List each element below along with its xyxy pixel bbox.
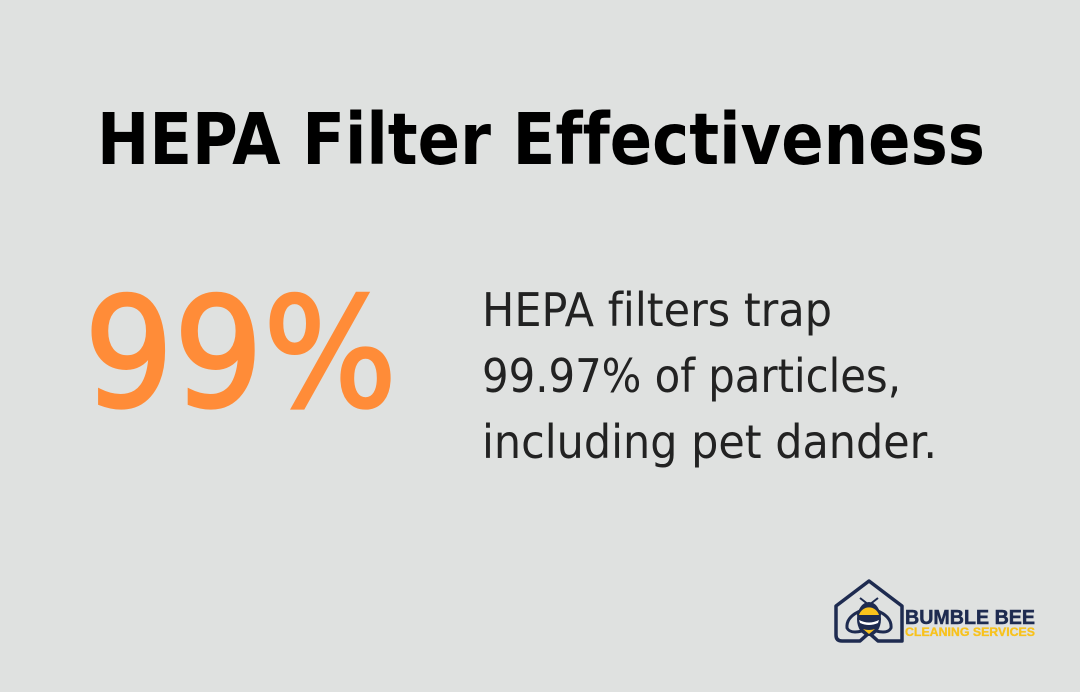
logo wordmark: BUMBLE BEE xyxy=(905,607,1035,629)
icon: house outline with bee xyxy=(836,581,902,641)
stat description: including pet dander. xyxy=(482,415,937,469)
big stat: 99%: 99% xyxy=(84,265,397,442)
stat description xyxy=(482,283,937,469)
title: HEPA Filter Effectiveness xyxy=(97,98,985,181)
stat description: 99.97% of particles, xyxy=(482,349,901,403)
logo: Bumble Bee Cleaning Services xyxy=(836,581,1035,641)
logo tagline: CLEANING SERVICES xyxy=(905,627,1035,639)
stat description: HEPA filters trap xyxy=(482,283,832,337)
